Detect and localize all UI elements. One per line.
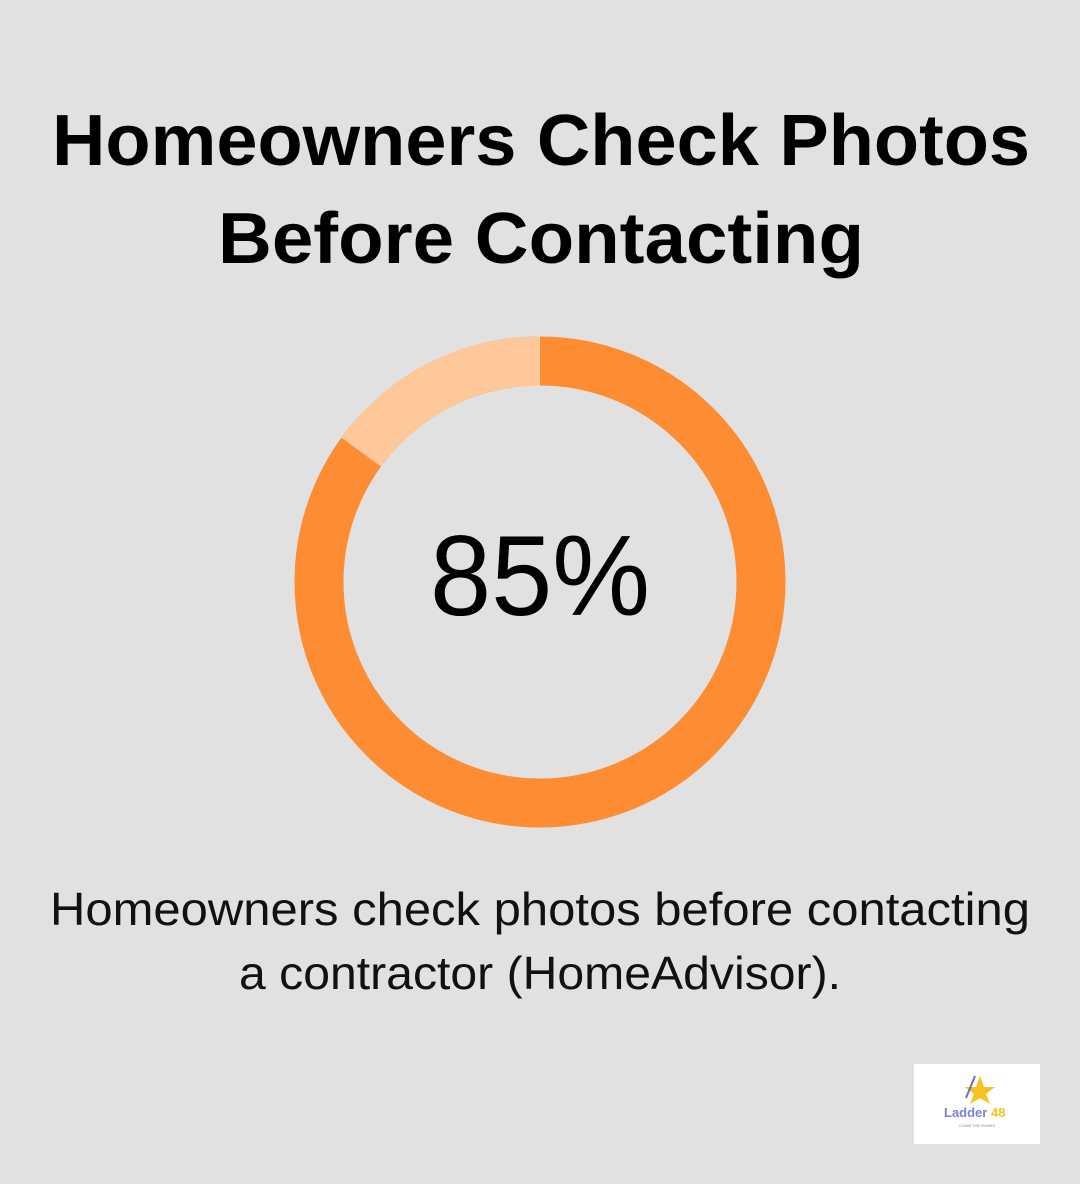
description: a contractor (HomeAdvisor). (239, 947, 841, 999)
title (52, 101, 1030, 279)
logo: Ladder 48 (944, 1105, 1005, 1120)
description: Homeowners check photos before contacting (50, 883, 1030, 935)
description (50, 883, 1030, 999)
light segment 15% (361, 361, 540, 452)
logo: CLIMB THE RANKS (959, 1123, 995, 1128)
percentage: 85% (430, 513, 650, 640)
title: Before Contacting (218, 199, 864, 279)
title: Homeowners Check Photos (52, 101, 1030, 181)
icon: ladder star (965, 1076, 995, 1104)
logo (914, 1064, 1040, 1144)
donut chart (319, 361, 761, 803)
